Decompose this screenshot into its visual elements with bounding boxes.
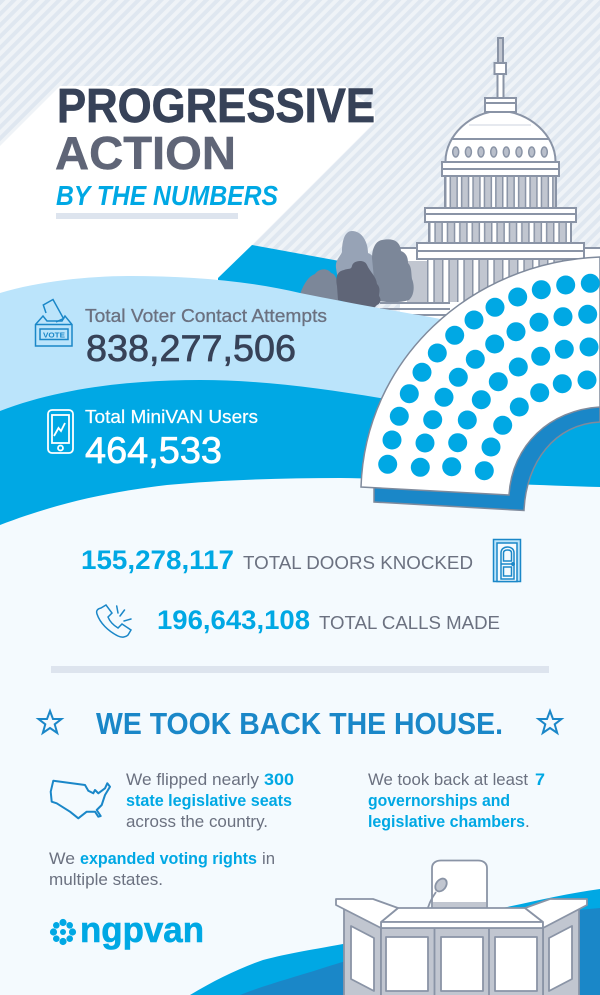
stat: voter contact attempts xyxy=(36,300,327,369)
tree right xyxy=(372,239,414,302)
seating chamber shadow xyxy=(374,390,600,510)
illustration: seating chamber xyxy=(361,257,600,510)
capitol dome xyxy=(445,111,556,162)
tree left xyxy=(300,269,340,302)
illustration: podium xyxy=(336,860,587,995)
text: voting rights: We xyxy=(49,849,75,868)
text: voting rights: in xyxy=(262,849,275,868)
label: voter contact: Total Voter Contact Attempts xyxy=(85,306,327,326)
text: governorships: legislative chambers xyxy=(368,812,525,831)
podium desktop xyxy=(336,899,587,928)
subtitle: BY THE NUMBERS xyxy=(56,180,279,211)
tree front xyxy=(336,261,380,310)
text: voting rights xyxy=(49,849,275,889)
title line 1: PROGRESSIVE xyxy=(57,80,375,133)
light blue wave xyxy=(0,276,600,480)
text: governorships: . xyxy=(525,812,530,831)
tree back xyxy=(336,231,378,292)
stat: minivan users xyxy=(48,407,258,471)
speaker chair xyxy=(432,860,487,908)
bottom dark blue wave xyxy=(240,908,600,995)
icon: smartphone xyxy=(48,410,73,453)
capitol lower cornice xyxy=(417,243,584,259)
capitol middle columns xyxy=(429,222,571,243)
capitol upper columns xyxy=(445,176,556,208)
text: flipped seats: across the country. xyxy=(126,812,268,831)
microphone xyxy=(421,876,449,917)
number: doors: 155,278,117 xyxy=(81,545,234,575)
number: minivan: 464,533 xyxy=(85,430,222,471)
label: doors: TOTAL DOORS KNOCKED xyxy=(243,552,473,573)
cyan back hill xyxy=(218,245,345,310)
section divider xyxy=(51,666,549,673)
text: governorships: governorships and xyxy=(368,791,510,810)
number: voter contact: 838,277,506 xyxy=(86,328,296,369)
cyan wave xyxy=(0,380,600,530)
illustration: capitol building xyxy=(380,38,600,323)
label: calls: TOTAL CALLS MADE xyxy=(319,612,500,633)
title block xyxy=(55,80,375,211)
capitol middle cornice xyxy=(425,208,576,222)
text: governorships xyxy=(368,770,545,831)
podium front xyxy=(381,928,543,995)
capitol wings xyxy=(380,248,600,323)
stat: doors knocked xyxy=(81,540,520,582)
logo: ngpvan xyxy=(50,909,204,950)
text: flipped seats: We flipped nearly xyxy=(126,770,259,789)
text: flipped seats: state legislative seats xyxy=(126,791,292,810)
text: flipped seats: 300 xyxy=(264,770,294,789)
podium side panels xyxy=(344,908,579,995)
seating chamber floor xyxy=(361,257,600,495)
logo mark xyxy=(50,919,76,945)
label: minivan: Total MiniVAN Users xyxy=(85,407,258,427)
capitol dome cornice xyxy=(442,162,559,176)
bottom cyan wave xyxy=(190,889,600,995)
icon label: vote: VOTE xyxy=(43,330,65,339)
icon: star left xyxy=(38,711,62,733)
striped header background xyxy=(0,0,600,340)
icon: ballot box xyxy=(36,300,72,346)
icon: door xyxy=(494,540,520,582)
icon: usa map xyxy=(51,781,110,818)
text: governorships: 7 xyxy=(535,770,545,789)
icon: telephone xyxy=(97,605,131,637)
text: voting rights: expanded voting rights xyxy=(80,849,257,868)
text: governorships: We took back at least xyxy=(368,770,528,789)
number: calls: 196,643,108 xyxy=(157,605,310,635)
white title band xyxy=(0,86,375,310)
text: voting rights: multiple states. xyxy=(49,870,163,889)
logo wordmark: ngpvan xyxy=(80,909,204,950)
section heading xyxy=(38,706,562,741)
stat: calls made xyxy=(97,605,500,637)
icon: star right xyxy=(538,711,562,733)
seat dots xyxy=(378,274,600,480)
capitol cupola and spire xyxy=(485,38,516,112)
lower page background wave xyxy=(0,478,600,995)
illustration: trees xyxy=(300,231,414,310)
subtitle underline xyxy=(56,213,238,219)
heading text: WE TOOK BACK THE HOUSE. xyxy=(96,706,503,741)
title line 2: ACTION xyxy=(55,127,236,179)
text: flipped seats xyxy=(126,770,294,831)
